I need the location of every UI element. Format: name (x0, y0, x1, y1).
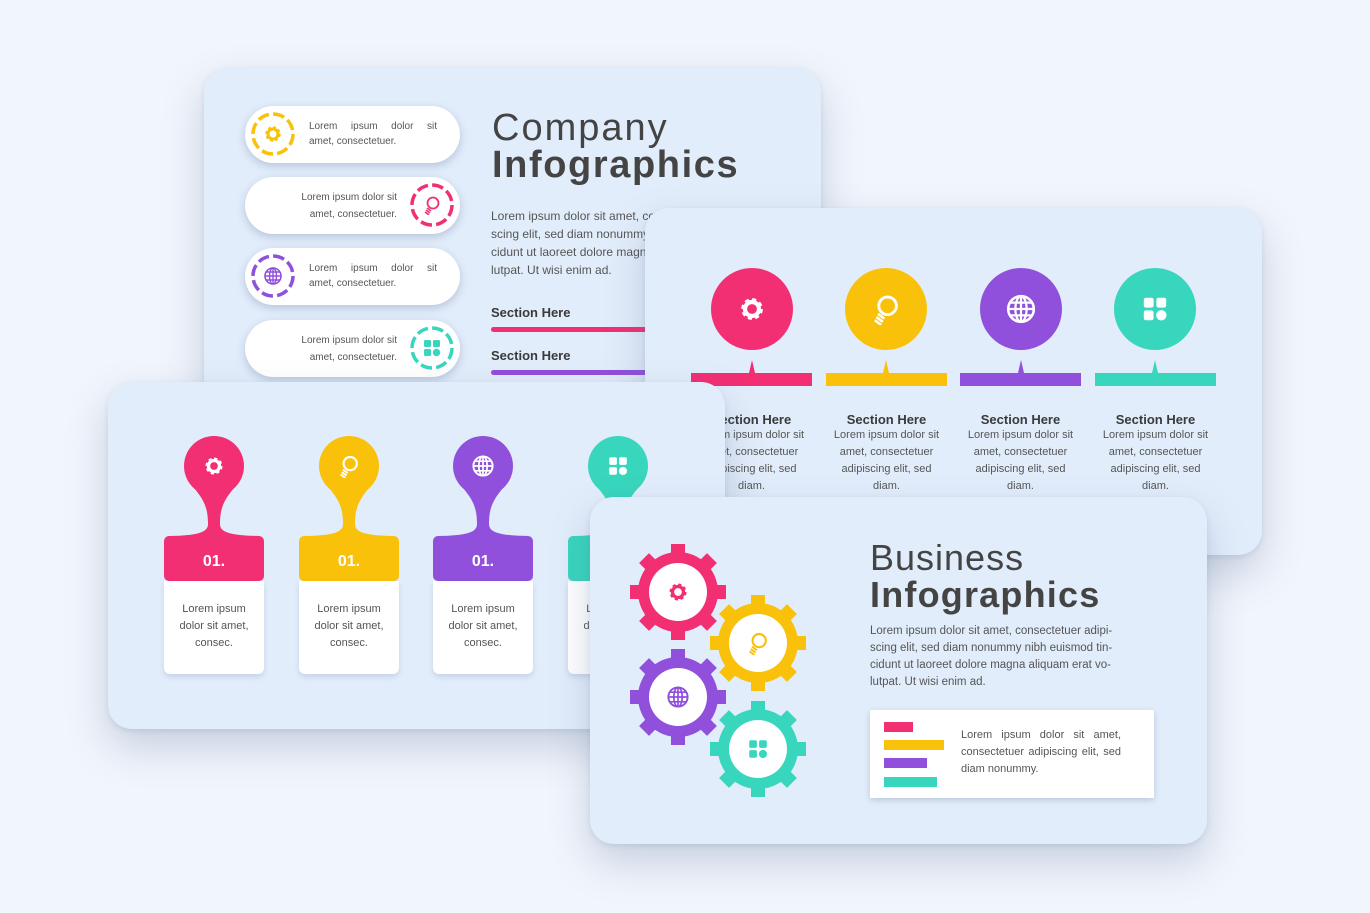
section 2: Section Here (491, 348, 570, 363)
tag pink: 01. (203, 553, 225, 570)
column purple: Section Here (981, 412, 1060, 427)
pill 1: Lorem ipsum dolor sit (309, 121, 437, 132)
tag yellow: 01. (338, 553, 360, 570)
card: business infographics (590, 497, 1207, 844)
tag purple: consec. (464, 637, 502, 649)
tag teal (566, 436, 653, 678)
tag pink: dolor sit amet, (179, 620, 249, 632)
tag pink: Lorem ipsum (182, 603, 246, 615)
column yellow: diam. (873, 480, 900, 492)
column yellow: Section Here (847, 412, 926, 427)
paragraph: lutpat. Ut wisi enim ad. (491, 263, 612, 277)
legend box: Lorem ipsum dolor sit amet, consectetuer adipiscing elit, sed diam nonummy. (961, 729, 1121, 775)
column pink (691, 268, 812, 492)
tag teal: dolor sit amet, (583, 620, 653, 632)
title: Infographics (492, 144, 739, 186)
card: four sections (645, 208, 1262, 555)
section 1: Section Here (491, 305, 570, 320)
paragraph (870, 625, 1112, 688)
column pink: adipiscing elit, sed (707, 463, 796, 475)
column yellow: amet, consectetuer (840, 446, 933, 458)
title (492, 107, 739, 186)
pill 2 (245, 177, 460, 234)
tag teal: 01. (607, 553, 629, 570)
gear yellow (710, 595, 806, 691)
column pink: amet, consectetuer (705, 446, 798, 458)
tag purple: Lorem ipsum (451, 603, 515, 615)
column yellow: Lorem ipsum dolor sit (834, 429, 939, 441)
gears (630, 544, 806, 797)
column pink: diam. (738, 480, 765, 492)
paragraph: cidunt ut laoreet dolore magna aliquam erat vo- (870, 659, 1111, 671)
tag teal: Lorem ipsum (586, 603, 650, 615)
pill 4: Lorem ipsum dolor sit (301, 335, 397, 346)
pill 4: amet, consectetuer. (310, 352, 397, 363)
column purple: adipiscing elit, sed (976, 463, 1065, 475)
title: Infographics (870, 574, 1100, 615)
gear pink (630, 544, 726, 640)
tag pink (162, 436, 266, 678)
column yellow: adipiscing elit, sed (842, 463, 931, 475)
pill 3: Lorem ipsum dolor sit (309, 263, 437, 274)
column purple: amet, consectetuer (974, 446, 1067, 458)
tag pink: consec. (195, 637, 233, 649)
tag yellow: Lorem ipsum (317, 603, 381, 615)
paragraph: lutpat. Ut wisi enim ad. (870, 676, 986, 688)
pill 3: amet, consectetuer. (309, 278, 396, 289)
pill 3 (245, 248, 460, 305)
legend box (870, 710, 1154, 798)
tag teal: consec. (599, 637, 637, 649)
column purple: Lorem ipsum dolor sit (968, 429, 1073, 441)
title: Business (870, 537, 1024, 578)
tag yellow (298, 436, 400, 678)
paragraph: Lorem ipsum dolor sit amet, consectetuer adipi- (491, 209, 744, 223)
title (870, 537, 1100, 615)
pill 1: amet, consectetuer. (309, 136, 396, 147)
section 1 (491, 305, 645, 332)
gear teal (710, 701, 806, 797)
section 2 (491, 348, 645, 375)
column purple (960, 268, 1081, 492)
paragraph: scing elit, sed diam nonummy nibh euismod tin- (870, 642, 1112, 654)
column purple: diam. (1007, 480, 1034, 492)
pill 2: amet, consectetuer. (310, 209, 397, 220)
gear purple (630, 649, 726, 745)
pill 2: Lorem ipsum dolor sit (301, 192, 397, 203)
tag purple: dolor sit amet, (448, 620, 518, 632)
tag purple: 01. (472, 553, 494, 570)
paragraph: cidunt ut laoreet dolore magna aliquam erat vo- (491, 245, 742, 259)
column yellow (826, 268, 947, 492)
paragraph (491, 209, 744, 277)
column pink: Section Here (712, 412, 791, 427)
column teal: adipiscing elit, sed (1111, 463, 1200, 475)
card: numbered tags (108, 382, 725, 729)
column teal: Lorem ipsum dolor sit (1103, 429, 1208, 441)
tag purple (432, 436, 534, 678)
column pink: Lorem ipsum dolor sit (699, 429, 804, 441)
tag yellow: consec. (330, 637, 368, 649)
title: Company (492, 107, 669, 149)
column teal: amet, consectetuer (1109, 446, 1202, 458)
paragraph: scing elit, sed diam nonummy nibh euismod tin- (491, 227, 744, 241)
pill 4 (245, 320, 460, 377)
tag yellow: dolor sit amet, (314, 620, 384, 632)
pill 1 (245, 106, 460, 163)
column teal (1095, 268, 1216, 492)
card: company infographics (204, 68, 821, 408)
column teal: diam. (1142, 480, 1169, 492)
paragraph: Lorem ipsum dolor sit amet, consectetuer adipi- (870, 625, 1112, 637)
column teal: Section Here (1116, 412, 1195, 427)
